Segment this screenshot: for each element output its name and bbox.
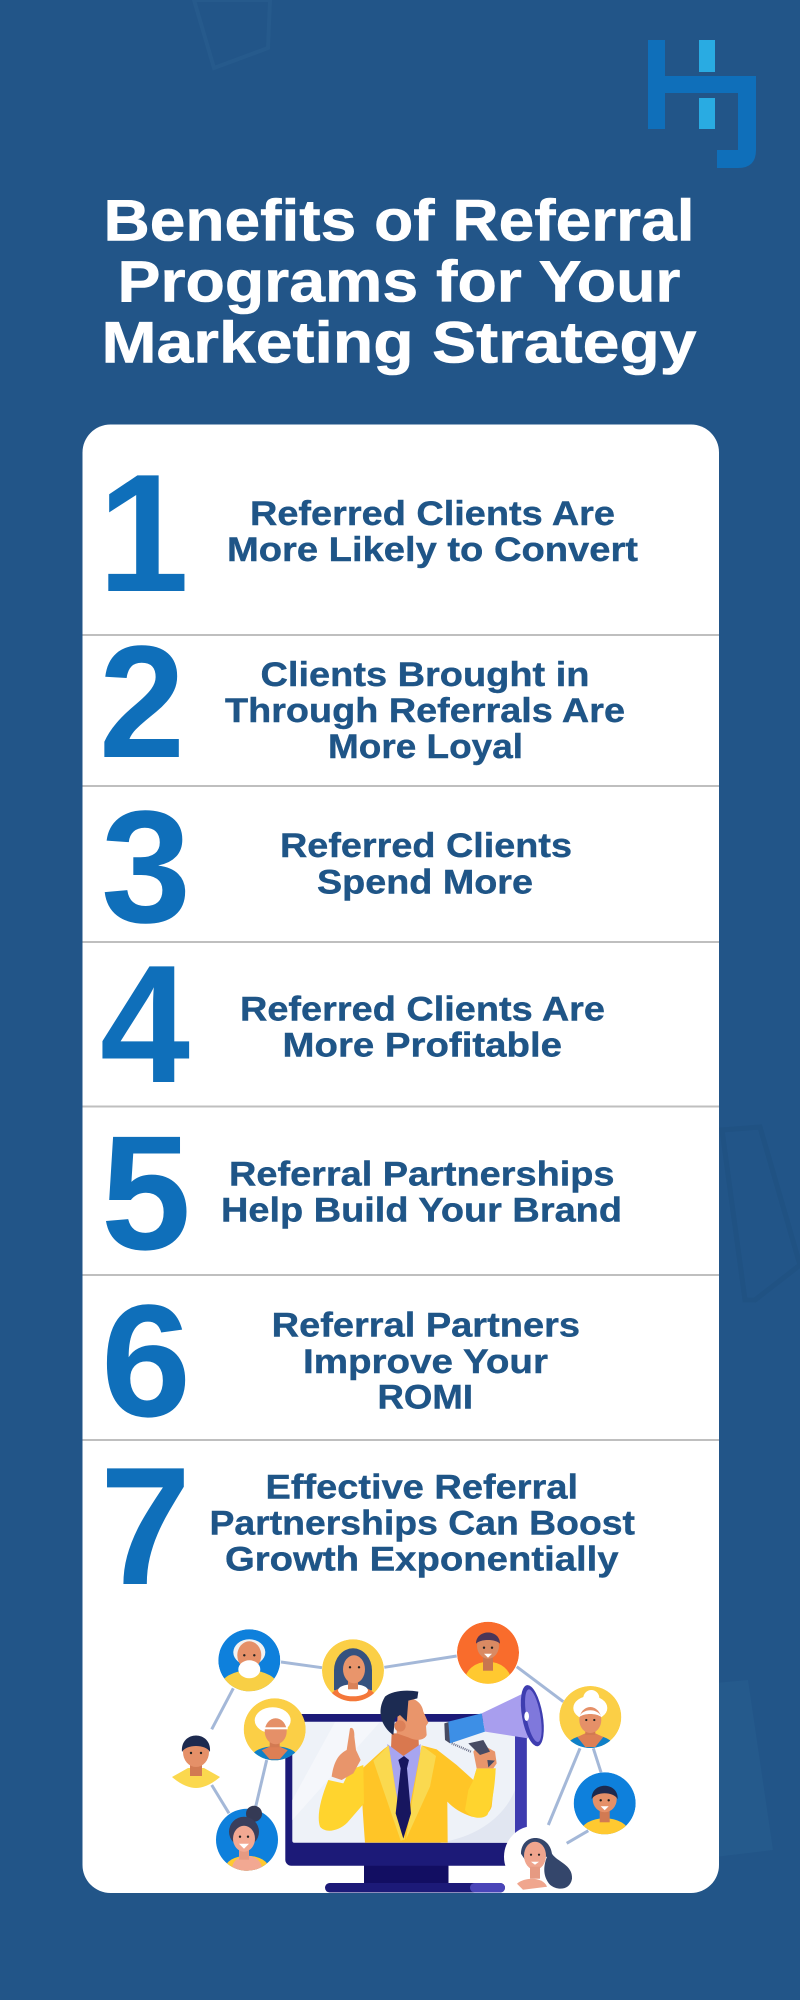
gripping hand <box>473 1743 497 1768</box>
network connection lines <box>212 1656 601 1843</box>
benefit 4: Referred Clients Are <box>240 990 605 1028</box>
avatar: older woman with bun <box>559 1686 622 1748</box>
benefit 5: 5 <box>101 1101 191 1284</box>
benefit 6: 6 <box>101 1271 191 1450</box>
right sleeve <box>465 1768 496 1818</box>
benefit 1: Referred Clients Are <box>250 495 615 533</box>
avatar: older woman with glasses <box>244 1698 306 1768</box>
illustration: referral network <box>172 1622 636 1892</box>
benefit 3: 3 <box>101 777 191 956</box>
face <box>397 1698 428 1740</box>
benefit 7: Growth Exponentially <box>225 1541 619 1579</box>
avatar: man without circle <box>172 1736 220 1788</box>
panel: benefits card <box>82 424 719 1893</box>
benefit 3: Referred Clients <box>280 827 572 865</box>
title: Benefits of Referral <box>104 189 694 254</box>
logo <box>648 40 756 168</box>
benefit 2 <box>99 612 625 791</box>
title <box>102 189 696 376</box>
neck <box>391 1733 419 1765</box>
benefit 3 <box>101 777 572 956</box>
benefit 2: 2 <box>99 612 185 791</box>
title: Marketing Strategy <box>102 311 696 376</box>
avatar: woman with long dark hair <box>322 1639 384 1708</box>
benefit 2: More Loyal <box>328 728 523 766</box>
benefit 4: More Profitable <box>282 1027 562 1065</box>
avatar: young man on blue <box>574 1772 636 1834</box>
avatar: smiling man on orange <box>457 1622 519 1684</box>
tie <box>396 1756 411 1839</box>
benefit 6 <box>101 1271 580 1450</box>
lapels <box>373 1745 405 1841</box>
benefit 7 <box>100 1432 635 1620</box>
benefit 6: Referral Partners <box>272 1307 580 1345</box>
left sleeve <box>319 1765 364 1831</box>
torso jacket <box>361 1745 496 1843</box>
benefit 4 <box>100 930 605 1118</box>
avatar: woman with flowing hair <box>504 1826 572 1890</box>
pointing hand <box>332 1728 361 1780</box>
benefit 5: Help Build Your Brand <box>221 1191 622 1229</box>
benefit 4: 4 <box>100 930 190 1118</box>
benefit 7: 7 <box>100 1432 191 1620</box>
benefit 7: Partnerships Can Boost <box>210 1505 635 1543</box>
benefit 1: 1 <box>98 439 189 627</box>
presenter with megaphone <box>319 1683 548 1843</box>
megaphone rear grip and coil <box>444 1722 450 1743</box>
avatar: woman with hair bun on blue <box>216 1806 278 1871</box>
hair <box>380 1691 418 1735</box>
benefit 1: More Likely to Convert <box>227 531 638 569</box>
title: Programs for Your <box>118 250 680 315</box>
benefit 5: Referral Partnerships <box>229 1156 614 1194</box>
shirt <box>387 1744 421 1813</box>
benefit 2: Clients Brought in <box>260 656 590 694</box>
benefit 2: Through Referrals Are <box>225 692 625 730</box>
benefit 5 <box>101 1101 622 1284</box>
benefit 1 <box>98 439 638 627</box>
benefit 7: Effective Referral <box>266 1468 578 1506</box>
megaphone body <box>448 1713 485 1743</box>
avatar: bearded old man <box>218 1629 280 1692</box>
monitor <box>285 1714 527 1892</box>
benefit 3: Spend More <box>317 864 533 902</box>
benefit 6: ROMI <box>378 1378 473 1416</box>
benefit 6: Improve Your <box>303 1343 548 1381</box>
